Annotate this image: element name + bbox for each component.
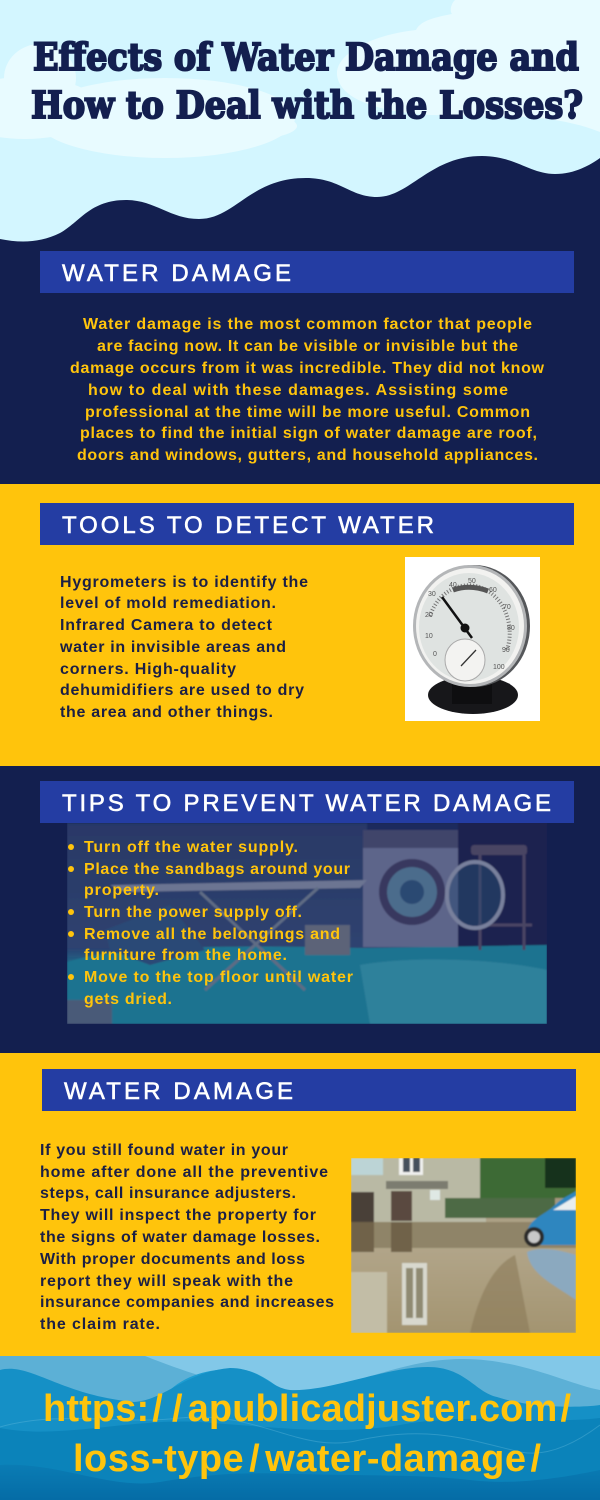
panel: water damage intro <box>0 240 600 484</box>
text block: intro paragraph: Water damage is the most common factor that people <box>83 316 532 333</box>
text block: adjusters: If you still found water in your <box>40 1142 288 1159</box>
text block: tools: corners. High-quality <box>60 661 236 678</box>
text block: adjusters: They will inspect the property for <box>40 1207 316 1224</box>
heading bar: tips <box>40 781 574 823</box>
panel: footer water with link <box>0 1356 600 1500</box>
text block: tools: water in invisible areas and <box>59 639 286 656</box>
image: hygrometer: 0 <box>433 651 437 658</box>
text block: adjusters: steps, call insurance adjusters. <box>40 1185 296 1202</box>
heading bar: water damage: WATER DAMAGE <box>62 260 291 287</box>
text block: tools: Infrared Camera to detect <box>60 617 273 634</box>
text block: adjusters: report they will speak with the <box>40 1273 293 1290</box>
text block: adjusters: insurance companies and increases <box>40 1294 334 1311</box>
text block: intro paragraph: doors and windows, gutters, and household appliances. <box>77 447 538 464</box>
text block: intro paragraph: places to find the initial sign of water damage are roof, <box>80 425 537 442</box>
list: prevention tips: Remove all the belongings and <box>84 926 340 943</box>
image: hygrometer: 70 <box>503 604 511 611</box>
list: prevention tips: Turn off the water supply. <box>84 839 298 856</box>
image: hygrometer: 90 <box>502 647 510 654</box>
list: prevention tips: property. <box>84 882 159 899</box>
image: hygrometer: 50 <box>468 578 476 585</box>
image: hygrometer: 10 <box>425 633 433 640</box>
list: prevention tips: Move to the top floor until water <box>84 969 353 986</box>
list: prevention tips: gets dried. <box>84 991 172 1008</box>
title <box>31 35 583 127</box>
link text: https://apublicadjuster.com/ <box>43 1388 571 1430</box>
text block: tools: dehumidifiers are used to dry <box>60 682 304 699</box>
image: flooded laundry room <box>67 823 547 1024</box>
text block: tools: the area and other things. <box>60 704 273 721</box>
panel: tools to detect water <box>0 484 600 766</box>
clouds <box>0 0 600 158</box>
image: hygrometer: 20 <box>425 612 433 619</box>
heading bar: water damage <box>40 251 574 293</box>
text block: adjusters: the claim rate. <box>40 1316 160 1333</box>
panel: insurance adjusters <box>0 1053 600 1356</box>
heading bar: water damage second: WATER DAMAGE <box>64 1078 293 1105</box>
heading bar: water damage second <box>42 1069 576 1111</box>
list: prevention tips: Place the sandbags around your <box>84 861 350 878</box>
image: hygrometer <box>405 557 540 721</box>
link text: loss-type/water-damage/ <box>73 1438 541 1480</box>
text block: intro paragraph: professional at the time will be more useful. Common <box>85 404 530 421</box>
text block: tools: level of mold remediation. <box>60 595 276 612</box>
image: hygrometer: 30 <box>428 591 436 598</box>
text block: intro paragraph <box>70 316 545 464</box>
text block: tools <box>59 574 308 721</box>
text block: intro paragraph: are facing now. It can be visible or invisible but the <box>97 338 518 355</box>
text block: adjusters: home after done all the preventive <box>40 1164 328 1181</box>
image: hygrometer: 100 <box>493 664 505 671</box>
image: flooded street with car <box>351 1158 576 1333</box>
text block: tools: Hygrometers is to identify the <box>60 574 308 591</box>
navy wave <box>0 156 600 300</box>
image: hygrometer: 60 <box>489 587 497 594</box>
text block: adjusters: the signs of water damage losses. <box>40 1229 320 1246</box>
heading bar: tools: TOOLS TO DETECT WATER <box>62 512 434 539</box>
text block: intro paragraph: damage occurs from it was incredible. They did not know <box>70 360 545 377</box>
heading bar: tips: TIPS TO PREVENT WATER DAMAGE <box>62 790 551 817</box>
link text <box>43 1388 571 1480</box>
image: hygrometer: 80 <box>507 625 515 632</box>
list: prevention tips: Turn the power supply off. <box>84 904 302 921</box>
text block: adjusters: With proper documents and loss <box>40 1251 305 1268</box>
heading bar: tools <box>40 503 574 545</box>
panel: tips to prevent water damage <box>40 781 574 1024</box>
text block: adjusters <box>40 1142 334 1333</box>
panel: header sky <box>0 0 600 300</box>
image: hygrometer: 40 <box>449 582 457 589</box>
list: prevention tips: furniture from the home. <box>84 947 287 964</box>
text block: intro paragraph: how to deal with these damages. Assisting some <box>88 382 508 399</box>
list: prevention tips <box>68 839 353 1008</box>
